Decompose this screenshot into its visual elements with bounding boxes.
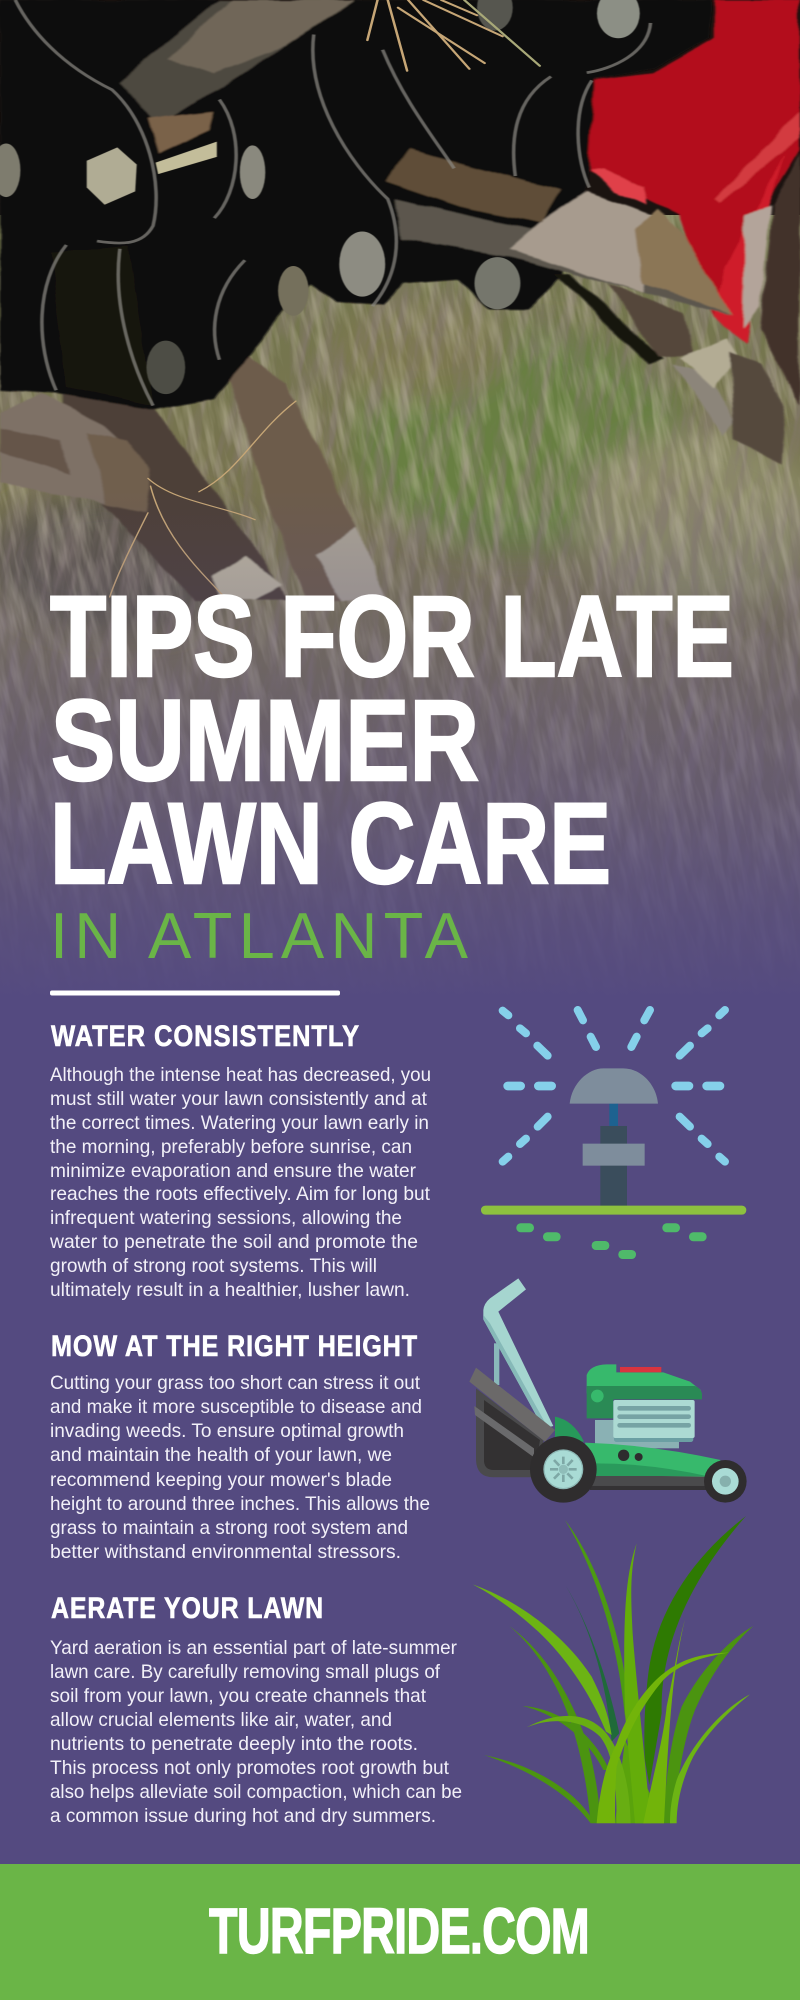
photo: purple fade overlay	[0, 490, 800, 1000]
text block: water consistently: minimize evaporation and ensure the water	[50, 1160, 417, 1182]
photo: soil arm centre	[228, 356, 356, 602]
text block: mow at the right height: and make it more susceptible to disease and	[50, 1396, 422, 1418]
text block: mow at the right height: recommend keeping your mower's blade	[50, 1469, 392, 1491]
heading: mow at the right height: MOW AT THE RIGHT HEIGHT	[51, 1330, 418, 1363]
engine	[555, 1364, 702, 1448]
text block: mow at the right height: and maintain the health of your lawn, we	[50, 1444, 392, 1466]
text block: water consistently: must still water your lawn consistently and at	[50, 1088, 428, 1110]
text block: water consistently: water to penetrate the soil and promote the	[49, 1231, 418, 1253]
section: mow at the right height	[50, 1330, 430, 1563]
photo: dark underlay behind rotor	[0, 0, 800, 215]
text block: aerate your lawn: allow crucial elements like air, water, and	[50, 1709, 392, 1731]
title line 2: SUMMER	[51, 677, 479, 805]
text block: water consistently: the correct times. Watering your lawn early in	[50, 1112, 429, 1134]
text block: water consistently: the morning, preferably before sunrise, can	[50, 1136, 412, 1158]
divider	[50, 990, 340, 996]
ground line	[481, 1206, 746, 1215]
text block: mow at the right height: better withstand environmental stressors.	[50, 1541, 401, 1563]
title	[50, 573, 734, 972]
text block: mow at the right height: grass to maintain a strong root system and	[50, 1517, 408, 1539]
section: water consistently	[49, 1020, 431, 1301]
grass dashes	[516, 1223, 707, 1259]
text block: water consistently	[49, 1064, 431, 1301]
photo: bolts and rivets	[0, 0, 640, 394]
photo: straw and roots	[110, 0, 540, 597]
subtitle: IN ATLANTA	[50, 899, 469, 972]
text block: mow at the right height: height to around three inches. This allows the	[50, 1493, 430, 1515]
photo: red machine body	[587, 0, 800, 344]
text block: mow at the right height	[50, 1372, 430, 1563]
footer band	[0, 1864, 800, 2000]
mower deck	[585, 1443, 721, 1490]
text block: aerate your lawn: This process not only promotes root growth but	[50, 1757, 450, 1779]
text block: aerate your lawn: lawn care. By carefully removing small plugs of	[50, 1661, 441, 1683]
hero photo: aerator tines on a lawn	[0, 0, 800, 942]
text block: aerate your lawn: also helps alleviate soil compaction, which can be	[50, 1781, 462, 1803]
water drops	[503, 1010, 725, 1162]
text block: aerate your lawn: a common issue during hot and dry summers.	[50, 1805, 436, 1827]
text block: water consistently: infrequent watering sessions, allowing the	[50, 1207, 402, 1229]
text block: water consistently: growth of strong root systems. This will	[50, 1255, 377, 1277]
photo: grass ground	[0, 215, 800, 942]
text block: water consistently: Although the intense heat has decreased, you	[50, 1064, 431, 1086]
text block: aerate your lawn: soil from your lawn, you create channels that	[50, 1685, 427, 1707]
mower handle	[483, 1278, 553, 1428]
text block: water consistently: ultimately result in a healthier, lusher lawn.	[50, 1279, 410, 1301]
photo: top tine	[120, 0, 355, 126]
footer url: TURFPRIDE.COM	[209, 1895, 589, 1967]
photo: right tine with soil plug	[395, 191, 730, 316]
front wheel	[704, 1460, 747, 1503]
photo: black bar right and tips	[554, 274, 663, 364]
photo: left tine with soil plug	[0, 392, 117, 505]
text block: aerate your lawn	[50, 1637, 462, 1827]
text block: water consistently: reaches the roots effectively. Aim for long but	[50, 1183, 431, 1205]
title line 3: LAWN CARE	[50, 780, 611, 908]
sprinkler head	[570, 1068, 658, 1206]
icon: lawn mower	[469, 1278, 747, 1503]
photo: aerator machinery	[0, 0, 800, 600]
text block: mow at the right height: invading weeds. To ensure optimal growth	[50, 1420, 404, 1442]
text block: mow at the right height: Cutting your grass too short can stress it out	[50, 1372, 421, 1394]
text block: aerate your lawn: nutrients to penetrate deeply into the roots.	[50, 1733, 418, 1755]
photo: black rotor plates	[0, 0, 712, 409]
rear wheel	[530, 1436, 597, 1503]
grass bag	[469, 1368, 555, 1477]
photo: soil arm left	[61, 383, 286, 600]
icon: grass tuft	[473, 1516, 753, 1823]
icon: sprinkler	[481, 1010, 746, 1259]
text block: aerate your lawn: Yard aeration is an essential part of late-summer	[50, 1637, 458, 1659]
photo: plate edge highlights	[15, 0, 651, 406]
section: aerate your lawn	[50, 1592, 462, 1827]
heading: aerate your lawn: AERATE YOUR LAWN	[51, 1592, 324, 1625]
photo: brown soil at right edge	[760, 153, 800, 406]
heading: water consistently: WATER CONSISTENTLY	[51, 1020, 360, 1053]
